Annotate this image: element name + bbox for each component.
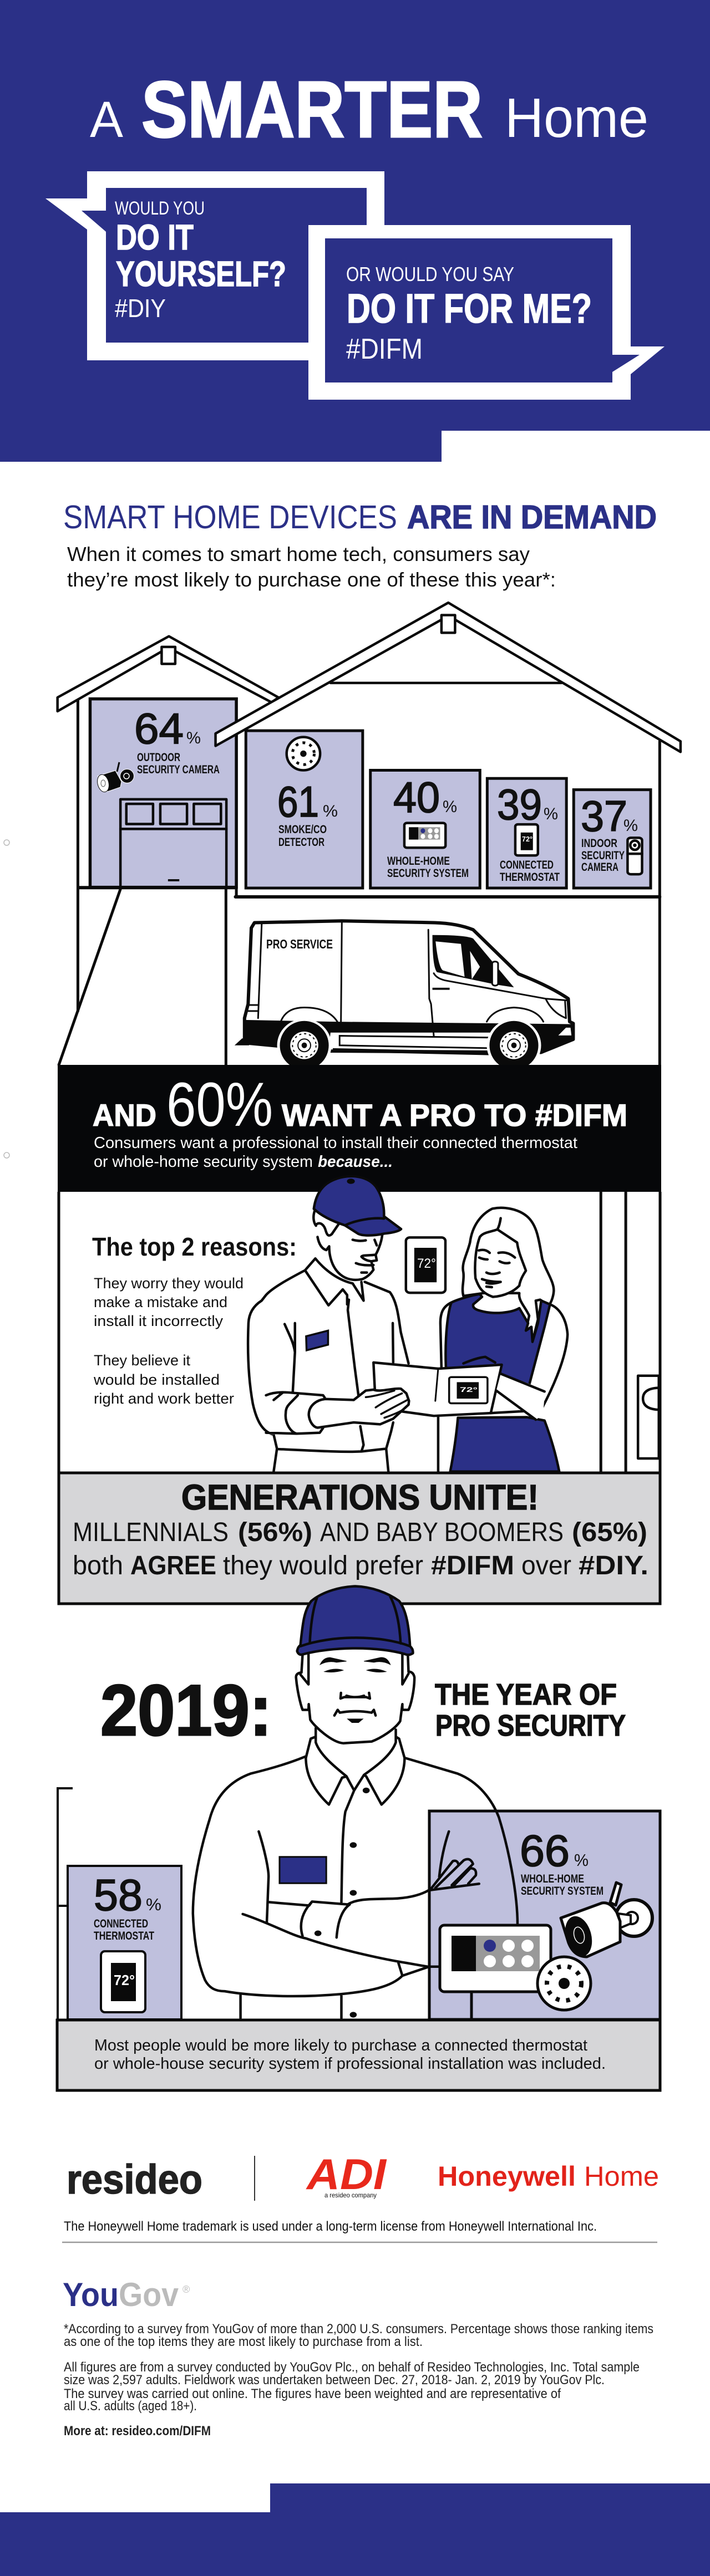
title: Home xyxy=(505,87,648,149)
cap xyxy=(297,1587,413,1655)
facial features xyxy=(320,1657,390,1722)
heading: top 2 reasons: The top 2 reasons: xyxy=(92,1232,297,1261)
name badge xyxy=(280,1857,326,1883)
stat: 40% whole-home security: WHOLE-HOME xyxy=(387,855,450,868)
text line: both agree: #DIFM xyxy=(431,1551,514,1580)
house illustration xyxy=(58,603,681,1072)
footnotes xyxy=(64,2322,653,2439)
technician xyxy=(248,1176,409,1472)
bracket xyxy=(58,1788,73,2020)
logo: ADI: a resideo company xyxy=(324,2191,377,2199)
icon: security panel xyxy=(404,823,445,848)
technician forearm and hand xyxy=(309,1389,409,1427)
stat: 66% whole-home security: WHOLE-HOME xyxy=(521,1873,584,1885)
black banner: 60% want a pro: WANT A PRO TO #DIFM xyxy=(282,1098,627,1133)
intro text: they’re most likely to purchase one of these this year*: xyxy=(67,568,556,591)
icon: wall thermostat xyxy=(406,1237,445,1293)
text line: millennials and boomers: (65%) xyxy=(572,1518,647,1547)
black banner: 60% want a pro xyxy=(58,1065,661,1192)
house stat labels xyxy=(134,704,638,951)
reason two: They believe it xyxy=(94,1352,190,1369)
black banner: 60% want a pro: or whole-home security system xyxy=(94,1153,313,1171)
speech bubble: do it yourself: #DIY xyxy=(115,294,166,323)
stat: 66% whole-home security: % xyxy=(574,1850,589,1870)
callout: professional installation: Most people would be more likely to purchase a connected thermostat xyxy=(94,2037,587,2054)
reason two: would be installed xyxy=(93,1371,220,1388)
reason two xyxy=(93,1352,234,1407)
stat: 37% indoor security camera xyxy=(581,792,638,874)
panel: thermostat box xyxy=(487,778,566,888)
reason one: make a mistake and xyxy=(94,1294,227,1310)
stat: 66% whole-home security xyxy=(520,1826,604,1897)
panel: 66% security box xyxy=(429,1811,660,2019)
speech bubble: do it for me: OR WOULD YOU SAY xyxy=(346,263,514,285)
text line: both agree: both xyxy=(73,1551,123,1580)
stat: 37% indoor security camera: INDOOR xyxy=(581,837,617,850)
panel: whole-home security box xyxy=(371,771,480,888)
text line: millennials and boomers: (56%) xyxy=(238,1518,312,1547)
speech bubble: do it for me: #DIFM xyxy=(346,333,423,365)
panel: 58% thermostat box: % xyxy=(146,1895,161,1914)
footer band xyxy=(0,2483,710,2576)
logo: ADI: ADI xyxy=(306,2150,387,2198)
van window xyxy=(433,935,514,987)
woman forearm xyxy=(496,1374,545,1420)
callout: professional installation: or whole-house security system if professional installation was included. xyxy=(94,2055,606,2073)
section heading: SMART HOME DEVICES xyxy=(63,499,397,535)
door xyxy=(601,1192,659,1472)
heading: the year of pro security xyxy=(435,1678,626,1742)
garage door xyxy=(120,799,226,887)
stat: 37% indoor security camera: 37 xyxy=(581,792,627,840)
icon: outdoor camera xyxy=(561,1883,652,1960)
text line: both agree: over xyxy=(521,1551,571,1580)
thermostat readouts: 72° xyxy=(417,1256,436,1271)
stat: 39% connected thermostat: THERMOSTAT xyxy=(500,871,560,884)
speech bubble: do it yourself: DO IT xyxy=(116,217,194,257)
icon: thermostat xyxy=(515,824,538,855)
black banner: 60% want a pro: because... xyxy=(318,1153,393,1171)
van label: PRO SERVICE xyxy=(266,937,333,951)
panel: 58% thermostat box xyxy=(68,1866,181,2019)
reason two: right and work better xyxy=(94,1390,234,1407)
logo divider xyxy=(254,2156,255,2201)
reason one xyxy=(94,1275,244,1329)
van lower band xyxy=(244,1020,573,1053)
intro text: When it comes to smart home tech, consumers say xyxy=(67,543,530,565)
speech bubble: do it for me xyxy=(308,225,665,400)
illustration: technician and customer xyxy=(248,1176,567,1472)
front wheel xyxy=(487,1019,541,1072)
trademark note: The Honeywell Home trademark is used under a long-term license from Honeywell International Inc. xyxy=(64,2219,597,2234)
callout: professional installation xyxy=(57,2020,660,2090)
stat: 64% outdoor security camera: SECURITY CAMERA xyxy=(137,763,220,776)
house walls and driveway xyxy=(59,683,660,1066)
speech bubble: do it for me: DO IT FOR ME? xyxy=(347,285,592,331)
footnotes: The survey was carried out online. The figures have been weighted and are representative of xyxy=(64,2386,561,2401)
speech bubble: do it yourself xyxy=(45,171,384,360)
text line: millennials and boomers: AND BABY BOOMERS xyxy=(320,1518,564,1547)
intro text xyxy=(67,543,556,591)
technician cap xyxy=(314,1176,401,1236)
icon: thermostat xyxy=(101,1951,145,2012)
heading: 2019: 2019: xyxy=(100,1670,272,1751)
stat: 40% whole-home security: SECURITY SYSTEM xyxy=(387,867,469,880)
woman xyxy=(438,1208,567,1472)
text line: both agree: AGREE xyxy=(130,1551,216,1580)
stat: 64% outdoor security camera: OUTDOOR xyxy=(137,751,180,764)
footnotes: *According to a survey from YouGov of more than 2,000 U.S. consumers. Percentage shows those ranking items xyxy=(64,2322,653,2337)
icon: smoke detector xyxy=(537,1957,591,2010)
icon: security panel xyxy=(440,1925,551,2019)
garage roof xyxy=(58,636,278,711)
logo: YouGov: ® xyxy=(182,2284,190,2295)
title: SMARTER xyxy=(141,65,483,154)
black banner: 60% want a pro: Consumers want a professional to install their connected thermostat xyxy=(94,1134,577,1152)
panel: top 2 reasons xyxy=(59,1176,660,1473)
text line: millennials and boomers xyxy=(73,1518,647,1547)
stat: 40% whole-home security: % xyxy=(443,798,457,816)
thermostat readouts: 72° xyxy=(460,1386,478,1394)
text line: both agree: #DIY. xyxy=(579,1551,648,1580)
black banner: 60% want a pro: AND xyxy=(93,1098,156,1133)
black banner: 60% want a pro: 60% xyxy=(166,1070,273,1139)
stat: 66% whole-home security: 66 xyxy=(520,1826,570,1875)
shirt xyxy=(193,1728,518,2018)
stat: 39% connected thermostat xyxy=(497,780,560,884)
heading: the year of pro security: THE YEAR OF xyxy=(435,1678,617,1711)
text line: millennials and boomers: MILLENNIALS xyxy=(73,1518,229,1547)
speech bubble: do it yourself: WOULD YOU xyxy=(115,198,205,219)
text line: both agree: they would prefer xyxy=(223,1551,423,1580)
panel: 58% thermostat box: 58 xyxy=(94,1870,143,1920)
footnotes: More at: resideo.com/DIFM xyxy=(64,2424,211,2439)
brochure xyxy=(373,1363,502,1416)
logos row xyxy=(67,2150,659,2202)
panel: outdoor camera box xyxy=(90,699,236,887)
footnotes: all U.S. adults (aged 18+). xyxy=(64,2399,197,2414)
illustration: technician with crossed arms xyxy=(193,1587,518,2018)
icon: smoke detector xyxy=(287,737,320,771)
stat: 39% connected thermostat: % xyxy=(544,805,558,823)
panel: smoke detector box xyxy=(246,731,363,888)
stat: 61% smoke detector xyxy=(277,777,338,849)
shirt buttons xyxy=(315,1788,369,2018)
panel: indoor camera box xyxy=(574,790,651,888)
heading: the year of pro security: PRO SECURITY xyxy=(435,1709,626,1742)
stat: 39% connected thermostat: 39 xyxy=(497,780,542,829)
rear wheel xyxy=(277,1019,332,1072)
text line: both agree xyxy=(73,1551,648,1580)
reason one: install it incorrectly xyxy=(94,1313,224,1329)
stat: 37% indoor security camera: % xyxy=(623,817,638,835)
section heading: ARE IN DEMAND xyxy=(407,499,657,535)
heading: generations unite: GENERATIONS UNITE! xyxy=(181,1477,539,1517)
logo: resideo: resideo xyxy=(67,2156,202,2202)
panel: generations unite xyxy=(59,1473,660,1604)
logo: YouGov: You xyxy=(63,2276,119,2313)
panel: 58% thermostat box: CONNECTED xyxy=(94,1917,148,1930)
icon: indoor camera xyxy=(627,838,642,874)
name badge xyxy=(306,1330,328,1350)
face xyxy=(296,1655,414,1743)
footnotes: All figures are from a survey conducted by YouGov Plc., on behalf of Resideo Technologies, Inc. Total sample xyxy=(64,2360,640,2375)
stat: 64% outdoor security camera xyxy=(134,704,220,776)
stat: 40% whole-home security: 40 xyxy=(393,773,440,822)
stat: 37% indoor security camera: SECURITY xyxy=(581,849,625,862)
icon: thermostat: 72° xyxy=(114,1972,135,1988)
stat: 61% smoke detector: % xyxy=(323,802,338,820)
section heading xyxy=(63,499,657,535)
main roof xyxy=(216,603,681,752)
title: A xyxy=(90,91,124,148)
header banner xyxy=(0,0,710,462)
stat: 64% outdoor security camera: 64 xyxy=(134,704,184,753)
illustration: service van xyxy=(235,921,573,1072)
stat: 39% connected thermostat: 72° xyxy=(522,835,532,843)
stat: 61% smoke detector: 61 xyxy=(277,777,319,826)
logo: Honeywell Home xyxy=(438,2161,659,2192)
logo: YouGov xyxy=(63,2276,190,2313)
footnotes: as one of the top items they are most likely to purchase from a list. xyxy=(64,2334,423,2349)
logo: YouGov: Gov xyxy=(119,2276,179,2313)
stat: 61% smoke detector: SMOKE/CO xyxy=(278,823,327,836)
speech bubble: do it yourself: YOURSELF? xyxy=(116,254,286,294)
footnotes: size was 2,597 adults. Fieldwork was undertaken between Dec. 27, 2018- Jan. 2, 2019 by YouGov Plc. xyxy=(64,2373,605,2388)
logo: Honeywell Home: Home xyxy=(584,2161,659,2192)
stat: 66% whole-home security: SECURITY SYSTEM xyxy=(521,1885,604,1897)
stat: 61% smoke detector: DETECTOR xyxy=(278,836,324,849)
thermostat readouts xyxy=(417,1256,478,1394)
stat: 39% connected thermostat: CONNECTED xyxy=(500,859,554,871)
panel: 58% thermostat box: THERMOSTAT xyxy=(94,1930,154,1942)
reason one: They worry they would xyxy=(94,1275,244,1292)
stat: 40% whole-home security xyxy=(387,773,469,880)
panel: 2019 pro security xyxy=(57,1587,660,2090)
icon: outdoor camera xyxy=(95,762,134,793)
stat: 37% indoor security camera: CAMERA xyxy=(581,861,618,874)
logo: Honeywell Home: Honeywell xyxy=(438,2161,576,2192)
stat: 64% outdoor security camera: % xyxy=(186,729,201,747)
